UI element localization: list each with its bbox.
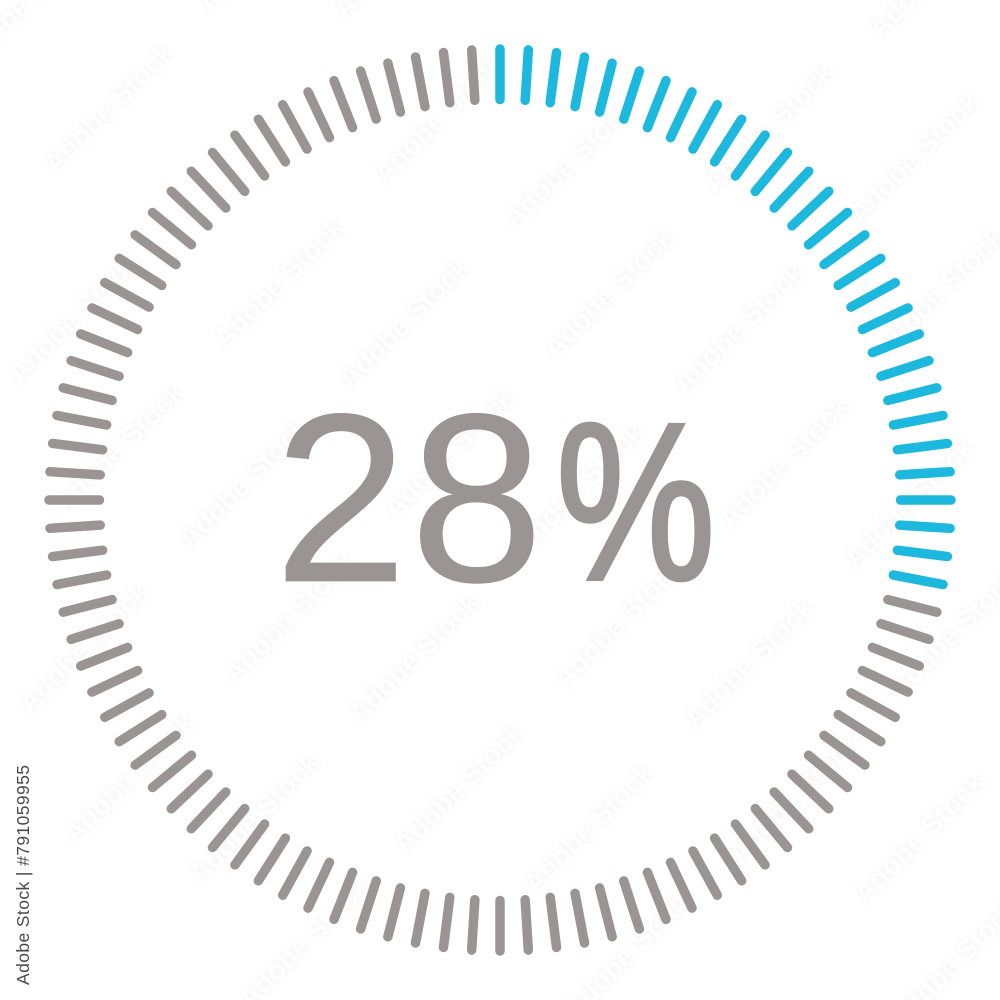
percentage value: % bbox=[556, 376, 715, 626]
watermark pattern: Adobe Stock bbox=[847, 766, 991, 909]
watermark pattern: Adobe Stock bbox=[332, 251, 476, 394]
watermark pattern: Adobe Stock bbox=[37, 36, 181, 179]
watermark pattern: Adobe Stock bbox=[517, 756, 661, 899]
percentage value: 2 bbox=[274, 364, 407, 632]
watermark pattern: Adobe Stock bbox=[207, 211, 351, 354]
watermark pattern: Adobe Stock bbox=[547, 551, 691, 694]
watermark pattern: Adobe Stock bbox=[2, 246, 146, 389]
watermark pattern: Adobe Stock bbox=[12, 576, 156, 719]
watermark pattern: Adobe Stock bbox=[57, 706, 201, 849]
watermark pattern: Adobe Stock bbox=[837, 431, 981, 574]
watermark pattern: Adobe Stock bbox=[387, 716, 531, 859]
watermark pattern: Adobe Stock bbox=[507, 416, 651, 559]
watermark pattern: Adobe Stock bbox=[172, 411, 316, 554]
watermark pattern: Adobe Stock bbox=[667, 256, 811, 399]
watermark pattern: Adobe Stock bbox=[537, 221, 681, 364]
percentage value: 8 bbox=[410, 364, 543, 632]
stock image id caption: Adobe Stock | #791059955 bbox=[13, 765, 33, 985]
watermark pattern: Adobe Stock bbox=[697, 56, 841, 199]
watermark pattern: Adobe Stock bbox=[497, 91, 641, 234]
progress ring: completed blue ticks bbox=[500, 49, 951, 585]
watermark pattern: Adobe Stock bbox=[842, 86, 986, 229]
watermark pattern: Adobe Stock bbox=[47, 376, 191, 519]
watermark pattern: Adobe Stock bbox=[342, 586, 486, 729]
watermark pattern: Adobe Stock bbox=[712, 391, 856, 534]
watermark pattern: Adobe Stock bbox=[367, 46, 511, 189]
watermark pattern: Adobe Stock bbox=[677, 591, 821, 734]
watermark pattern: Adobe Stock bbox=[217, 546, 361, 689]
watermark pattern: Adobe Stock bbox=[182, 746, 326, 889]
percentage value bbox=[274, 364, 715, 632]
watermark pattern: Adobe Stock bbox=[377, 381, 521, 524]
watermark pattern: Adobe Stock bbox=[722, 726, 866, 869]
